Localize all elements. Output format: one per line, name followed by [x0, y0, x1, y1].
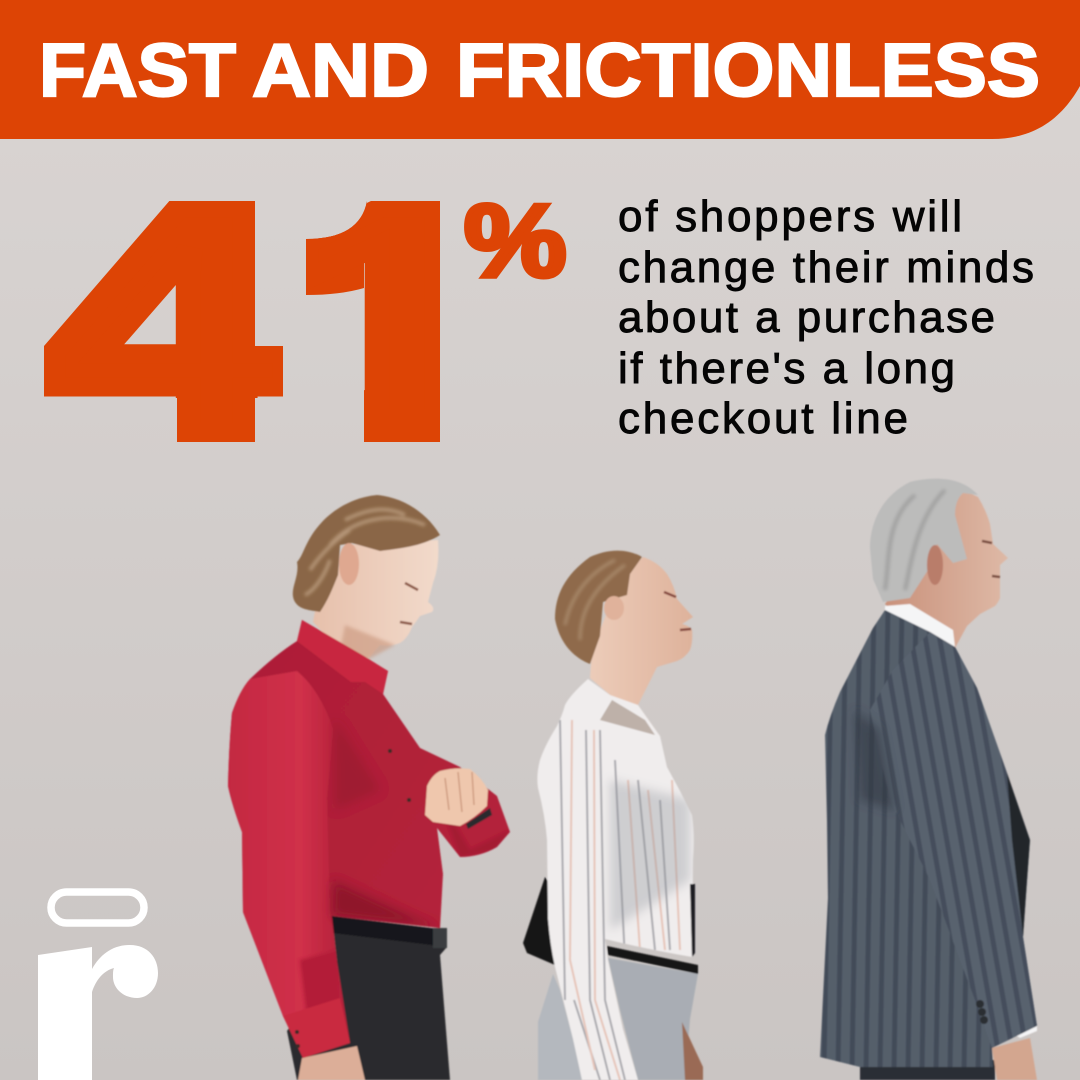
hand [682, 1022, 703, 1080]
big statistic: 41%: % [464, 184, 567, 299]
eye and lips [664, 592, 691, 630]
hair bun [555, 551, 642, 664]
person: woman in striped blouse [523, 551, 703, 1080]
eye and mouth [982, 541, 1000, 577]
sleeve [228, 671, 350, 1058]
statistic description: about a purchase [618, 293, 995, 342]
logo: stylised r with pill-shaped dot [38, 892, 158, 1080]
hand at side [298, 1046, 365, 1080]
statistic description: of shoppers will [618, 192, 962, 241]
blouse stripes [560, 700, 690, 1080]
neck and face [313, 540, 438, 660]
hair strands [565, 560, 625, 640]
trousers and belt [287, 916, 450, 1080]
cuff buttons [976, 1000, 988, 1024]
belt [607, 946, 698, 974]
neck and face [885, 490, 1008, 648]
sleeve [870, 632, 1037, 1048]
header banner [0, 0, 1080, 139]
ear [604, 596, 624, 620]
hand [992, 1038, 1037, 1080]
fist and watch [425, 768, 492, 829]
person: older man in pinstripe suit [820, 479, 1037, 1080]
eye and mouth [400, 583, 418, 624]
blouse front shadow [690, 884, 695, 957]
trousers [860, 1060, 995, 1080]
statistic description [618, 192, 1034, 443]
big statistic: 41%: 4 [46, 137, 290, 503]
statistic description: checkout line [618, 394, 908, 443]
big statistic: 41%: 1 [276, 137, 517, 503]
title: AND [252, 28, 429, 112]
grey trousers [538, 958, 698, 1080]
hair shading [885, 490, 945, 590]
shirt fold shading [283, 720, 510, 1058]
hair highlights [305, 510, 425, 595]
shirt [228, 620, 510, 1058]
neck, face [590, 557, 693, 736]
statistic description: if there's a long [618, 344, 955, 393]
white collar [885, 604, 955, 647]
neck shadow [340, 625, 395, 660]
statistic description: change their minds [618, 243, 1034, 292]
ear [339, 543, 359, 585]
jacket front [1007, 773, 1030, 937]
title: FRICTIONLESS [456, 28, 1040, 112]
title: FAST [39, 28, 236, 112]
grey hair [870, 479, 978, 602]
collar [297, 620, 388, 694]
handbag [523, 877, 560, 965]
person: man in red shirt checking watch [228, 495, 510, 1080]
blouse [537, 679, 694, 1080]
jacket [820, 610, 1037, 1067]
buttons [295, 749, 411, 1048]
hair [293, 495, 440, 612]
ear [927, 545, 943, 585]
title [39, 28, 1040, 112]
armpit shadow [855, 710, 895, 810]
big statistic: 41% [44, 201, 566, 442]
shirt cuff [1017, 1026, 1037, 1038]
